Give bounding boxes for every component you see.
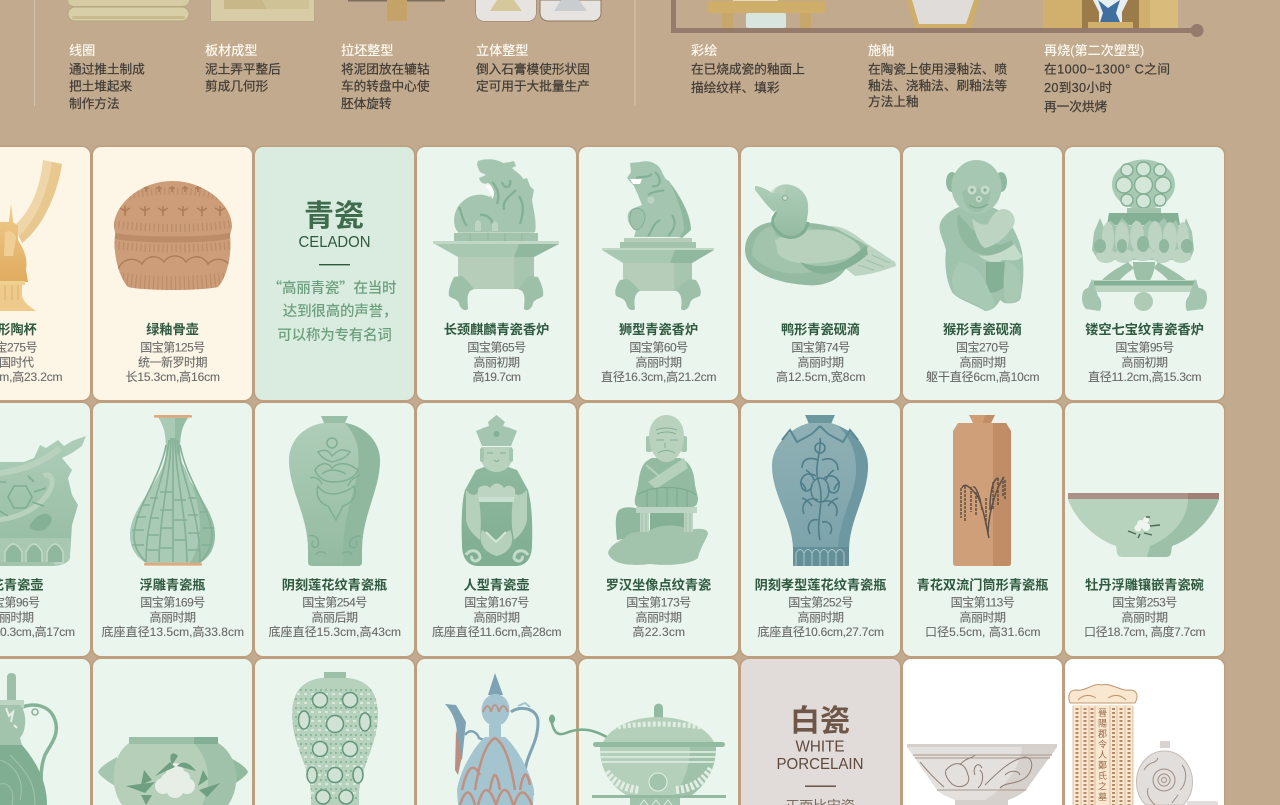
card details: 高丽初期 <box>1121 354 1168 369</box>
card details: 国宝第167号 <box>464 596 529 610</box>
card background <box>903 659 1062 805</box>
card details: 直径16.3cm,高21.2cm <box>601 369 716 384</box>
text: painting <box>691 42 805 95</box>
panel: lion censer card <box>579 147 738 400</box>
text: coil method: 线圈 <box>69 43 95 58</box>
illustration: peony jar <box>98 737 248 805</box>
card title: 阴刻孝型莲花纹青瓷瓶 <box>755 576 886 592</box>
card title: 狮型青瓷香炉 <box>619 321 698 337</box>
card details <box>758 596 884 639</box>
card details: 高丽时期 <box>959 354 1006 369</box>
card details: 高丽时期 <box>1121 610 1168 625</box>
text: slab method: 剪成几何形 <box>205 78 269 94</box>
panel: medallion vase card <box>255 659 414 805</box>
card background <box>93 659 252 805</box>
text: coil method <box>69 43 145 111</box>
illustration: lotus ewer <box>445 673 538 805</box>
text: wheel throwing: 将泥团放在辘轱 <box>341 62 430 76</box>
text: second firing <box>1044 42 1170 114</box>
icon: potter wheel <box>348 0 445 21</box>
illustration: openwork censer <box>1082 160 1207 311</box>
illustration: epitaph tablet <box>1069 684 1137 805</box>
panel: relief vase card <box>93 403 252 656</box>
card details: 国宝第253号 <box>1112 596 1177 610</box>
panel: white bowl card <box>903 659 1062 805</box>
card details: 高丽时期 <box>635 354 682 369</box>
panel: blue vase card <box>741 403 900 656</box>
heading: english: CELADON <box>298 234 370 251</box>
card details: 高12.5cm,宽8cm <box>776 369 866 384</box>
text: painting: 彩绘 <box>691 42 717 58</box>
card details: 高丽时期 <box>473 610 520 625</box>
card details <box>925 596 1040 639</box>
card details <box>432 596 562 639</box>
card details: 直径11.2cm,高15.3cm <box>1088 369 1202 384</box>
text: wheel throwing: 胚体旋转 <box>341 97 392 111</box>
card details: 国宝第173号 <box>626 596 691 610</box>
card details: 底座直径11.6cm,高28cm <box>432 624 562 639</box>
card details <box>0 341 62 384</box>
card details: 统一新罗时期 <box>138 354 207 369</box>
card title: 绿釉骨壶 <box>146 321 199 337</box>
card details <box>626 596 691 639</box>
illustration: peony bowl <box>1068 493 1219 557</box>
text: glazing: 釉法、浇釉法、刷釉法等 <box>868 78 1007 93</box>
illustration: figure ewer <box>462 415 532 566</box>
card title: 长颈麒麟青瓷香炉 <box>444 321 549 337</box>
panel: figure ewer card <box>417 403 576 656</box>
card details: 国宝第169号 <box>140 596 205 610</box>
illustration: lotus vase <box>289 416 380 566</box>
icon: glazing vessel <box>907 0 979 28</box>
card background <box>579 659 738 805</box>
text: glazing <box>868 43 1007 109</box>
epitaph text: 人 <box>1098 750 1107 760</box>
text: coil method: 制作方法 <box>69 96 120 111</box>
rule <box>805 786 836 787</box>
card details: 口径5.5cm, 高31.6cm <box>925 624 1040 639</box>
text: moulding <box>476 42 590 94</box>
card details <box>1084 596 1206 639</box>
card details <box>601 341 716 384</box>
panel: dragon turtle card <box>0 403 90 656</box>
card title: 浮雕青瓷瓶 <box>140 576 205 592</box>
text: moulding: 倒入石膏模使形状固 <box>476 62 590 76</box>
panel: grape ewer card <box>0 659 90 805</box>
divider left <box>34 0 635 106</box>
text: slab method: 泥土弄平整后 <box>205 62 281 76</box>
card details: 躯干直径6cm,高10cm <box>926 369 1040 384</box>
card details: 长15.3cm,高16cm <box>126 369 220 384</box>
card details: 高丽时期 <box>149 610 196 625</box>
card background <box>741 659 900 805</box>
heading: english: PORCELAIN <box>776 756 864 773</box>
card details: 国宝第60号 <box>629 341 688 355</box>
card title: 猴形青瓷砚滴 <box>943 321 1022 337</box>
panel: lotus vase card <box>255 403 414 656</box>
card details: 底座直径13.5cm,高33.8cm <box>102 624 244 639</box>
illustration: green ewer <box>0 673 56 805</box>
text: second firing: 再烧(第二次塑型) <box>1044 42 1144 58</box>
card details <box>1088 341 1202 384</box>
illustration: lidded bowl <box>549 704 726 805</box>
card background <box>255 147 414 400</box>
card details: 国宝第254号 <box>302 596 367 610</box>
icon: painting table <box>708 0 825 28</box>
description <box>268 277 397 345</box>
panel: monkey water dropper card <box>903 147 1062 400</box>
card background <box>255 403 414 656</box>
panel: peony bowl card <box>1065 403 1224 656</box>
card details <box>126 341 220 384</box>
card details: 高22.3cm <box>632 624 685 639</box>
text: second firing: 20到30小时 <box>1044 81 1112 95</box>
card background <box>741 147 900 400</box>
rule <box>319 264 350 265</box>
panel: bone urn card <box>93 147 252 400</box>
illustration: white bowl <box>907 744 1057 805</box>
epitaph text: 氏 <box>1098 771 1107 781</box>
card background <box>93 147 252 400</box>
card details: 国宝第125号 <box>140 341 205 355</box>
panel: lotus ewer card <box>417 659 576 805</box>
card details: 国宝第74号 <box>791 341 850 355</box>
card background <box>1065 403 1224 656</box>
card background <box>417 403 576 656</box>
card details: 底座直径10.6cm,27.7cm <box>758 624 884 639</box>
card background <box>1065 659 1224 805</box>
text: coil method: 把土堆起来 <box>69 80 133 94</box>
card details <box>102 596 244 639</box>
icon: plaster moulds <box>476 0 601 21</box>
card details: 高丽时期 <box>635 610 682 625</box>
illustration: lion censer <box>602 161 714 310</box>
card background <box>255 659 414 805</box>
card background <box>417 659 576 805</box>
card background <box>0 403 90 656</box>
panel: lidded bowl card <box>549 659 738 805</box>
card title: 罗汉坐像点纹青瓷 <box>606 576 711 592</box>
illustration: cylinder bottle <box>953 415 1011 566</box>
epitaph text: 鄭 <box>1098 760 1107 770</box>
card title: 阴刻莲花纹青瓷瓶 <box>282 576 387 592</box>
illustration: medallion vase <box>290 672 380 805</box>
text: slab method: 板材成型 <box>205 43 257 58</box>
card details <box>268 596 401 639</box>
card details: 口径18.7cm, 高度7.7cm <box>1084 624 1206 639</box>
card title: 牡丹浮雕镶嵌青瓷碗 <box>1085 576 1204 592</box>
text: wheel throwing: 车的转盘中心使 <box>341 78 430 94</box>
icon: clay coils <box>68 0 189 21</box>
epitaph text: 令 <box>1098 738 1107 750</box>
card background <box>579 147 738 400</box>
card details <box>0 596 75 639</box>
text: glazing: 施釉 <box>868 43 894 58</box>
card background <box>1065 147 1224 400</box>
panel: white porcelain title card <box>741 659 900 805</box>
description: 可以称为专有名词 <box>277 324 392 345</box>
illustration: bone urn <box>112 181 232 290</box>
panel: duck water dropper card <box>741 147 900 400</box>
card title: 镂空七宝纹青瓷香炉 <box>1085 321 1204 337</box>
card details: 国宝第65号 <box>467 341 526 355</box>
card details: 高19.7cm <box>472 369 521 384</box>
epitaph text: 陽 <box>1098 718 1107 728</box>
card details <box>926 341 1040 384</box>
text: glazing: 方法上釉 <box>868 94 919 109</box>
card background <box>417 147 576 400</box>
card title: 青花双流门筒形青瓷瓶 <box>917 576 1048 592</box>
icon: clay slab <box>211 0 314 21</box>
panel: epitaph tablet card <box>1065 659 1224 805</box>
card details: 国宝第252号 <box>788 596 853 610</box>
epitaph text: 晉 <box>1098 708 1107 718</box>
card details: 高丽后期 <box>311 610 358 625</box>
card background <box>0 659 90 805</box>
card details <box>776 341 866 384</box>
text: painting: 描绘纹样、填彩 <box>691 81 780 95</box>
heading: english: WHITE <box>796 738 844 756</box>
illustration: relief vase <box>130 415 215 566</box>
card background <box>579 403 738 656</box>
card details: 底座直径15.3cm,高43cm <box>268 624 401 639</box>
card background <box>93 403 252 656</box>
timeline frame <box>671 0 1204 37</box>
text: slab method <box>205 43 281 94</box>
heading: white porcelain: 白瓷 <box>790 705 850 738</box>
text: second firing: 再一次烘烤 <box>1044 100 1108 114</box>
card details: 高丽时期 <box>797 610 844 625</box>
epitaph text: 郡 <box>1098 729 1107 739</box>
panel: arhat card <box>579 403 738 656</box>
card background <box>903 403 1062 656</box>
text: moulding: 定可用于大批量生产 <box>476 80 590 94</box>
text: painting: 在已烧成瓷的釉面上 <box>691 62 805 76</box>
panel: cylinder bottle card <box>903 403 1062 656</box>
card background <box>741 403 900 656</box>
card details: 高丽初期 <box>473 354 520 369</box>
card background <box>903 147 1062 400</box>
illustration: seated arhat <box>608 415 708 565</box>
text: moulding: 立体整型 <box>476 42 528 58</box>
panel: celadon title card <box>255 147 414 400</box>
text: coil method: 通过推土制成 <box>69 62 145 76</box>
text: wheel throwing <box>341 42 430 111</box>
text: second firing: 在1000~1300° C之间 <box>1044 62 1170 76</box>
description: 达到很高的声誉， <box>283 300 397 321</box>
icon: kiln <box>1043 0 1178 28</box>
card details <box>467 341 526 384</box>
illustration: white flask <box>1136 741 1218 805</box>
illustration: duck dropper <box>745 184 896 285</box>
card title: 鸭形青瓷砚滴 <box>781 321 860 337</box>
card details: 国宝第95号 <box>1115 341 1174 355</box>
epitaph text: 之 <box>1098 780 1107 792</box>
panel: qilin censer card <box>417 147 576 400</box>
text: wheel throwing: 拉坯整型 <box>341 42 393 58</box>
illustration: dragon turtle ewer <box>0 436 86 566</box>
description: “高丽青瓷”在当时 <box>268 277 396 298</box>
heading: english <box>776 738 864 773</box>
card title: 人型青瓷壶 <box>464 576 529 592</box>
illustration: blue lotus vase <box>772 415 868 566</box>
epitaph text: 墓 <box>1098 791 1107 802</box>
illustration: qilin censer <box>433 159 559 310</box>
card details: 高丽时期 <box>959 610 1006 625</box>
card background <box>0 147 90 400</box>
illustration: monkey dropper <box>940 160 1023 311</box>
panel: openwork censer card <box>1065 147 1224 400</box>
panel: peony jar card <box>93 659 252 805</box>
card details: 高丽时期 <box>797 354 844 369</box>
heading: celadon: 青瓷 <box>304 200 364 233</box>
card details: 国宝第113号 <box>951 596 1015 610</box>
text: glazing: 在陶瓷上使用浸釉法、喷 <box>868 62 1007 76</box>
card details: 国宝270号 <box>956 341 1010 355</box>
panel: horn cup card <box>0 147 90 400</box>
illustration: horse rider horn cup <box>0 160 62 311</box>
